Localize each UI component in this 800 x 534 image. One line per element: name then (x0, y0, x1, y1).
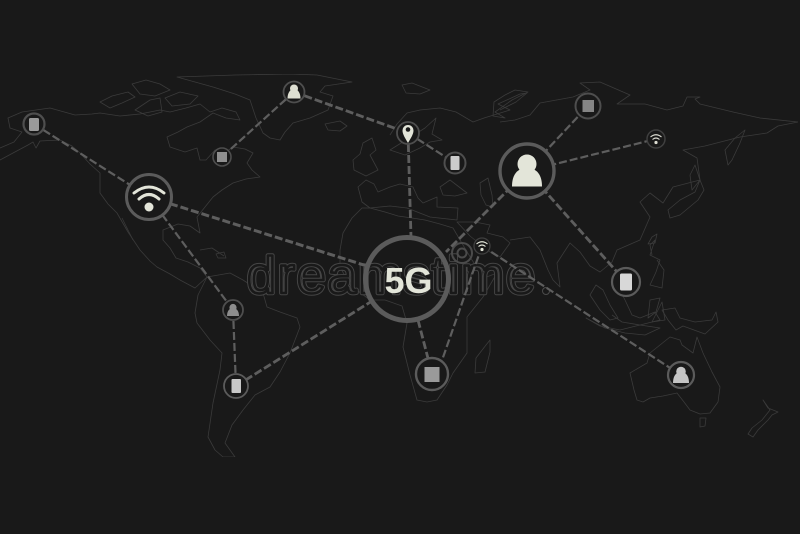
node: large wifi (126, 174, 172, 220)
watermark text: dreamstime (247, 247, 535, 305)
Arabia (457, 222, 510, 257)
node: phone Southeast Asia (612, 268, 640, 296)
Tasmania (700, 418, 706, 427)
dashed connection lines (34, 92, 681, 386)
North America (0, 104, 260, 288)
node: small wifi India (474, 238, 490, 254)
Australia (630, 337, 720, 414)
node: location pin (397, 122, 419, 144)
node: small wifi east Asia (647, 130, 665, 148)
node: square Canada (213, 148, 231, 166)
South America (195, 273, 300, 457)
Iceland, UK and Europe (402, 83, 430, 94)
node: large user (500, 144, 554, 198)
Indonesia and Pacific islands (590, 285, 618, 320)
node: user Australia (668, 362, 694, 388)
node: user Greenland (284, 82, 304, 102)
watermark text: dreamstime (247, 247, 535, 305)
node: 5G hub (366, 238, 448, 320)
watermark swirl (452, 243, 550, 294)
node: square Africa (416, 358, 448, 390)
node: phone South America (224, 374, 248, 398)
node: phone Russia (444, 152, 466, 174)
node: phone Alaska (24, 114, 44, 134)
Africa (340, 208, 497, 402)
Greenland (177, 74, 352, 140)
Madagascar (475, 340, 490, 373)
5G label: 5G (384, 260, 433, 301)
India and East Asia (500, 82, 798, 287)
New Zealand (748, 400, 778, 437)
node: user South America (223, 300, 243, 320)
node: square Siberia (576, 94, 600, 118)
world map outline (0, 74, 798, 457)
